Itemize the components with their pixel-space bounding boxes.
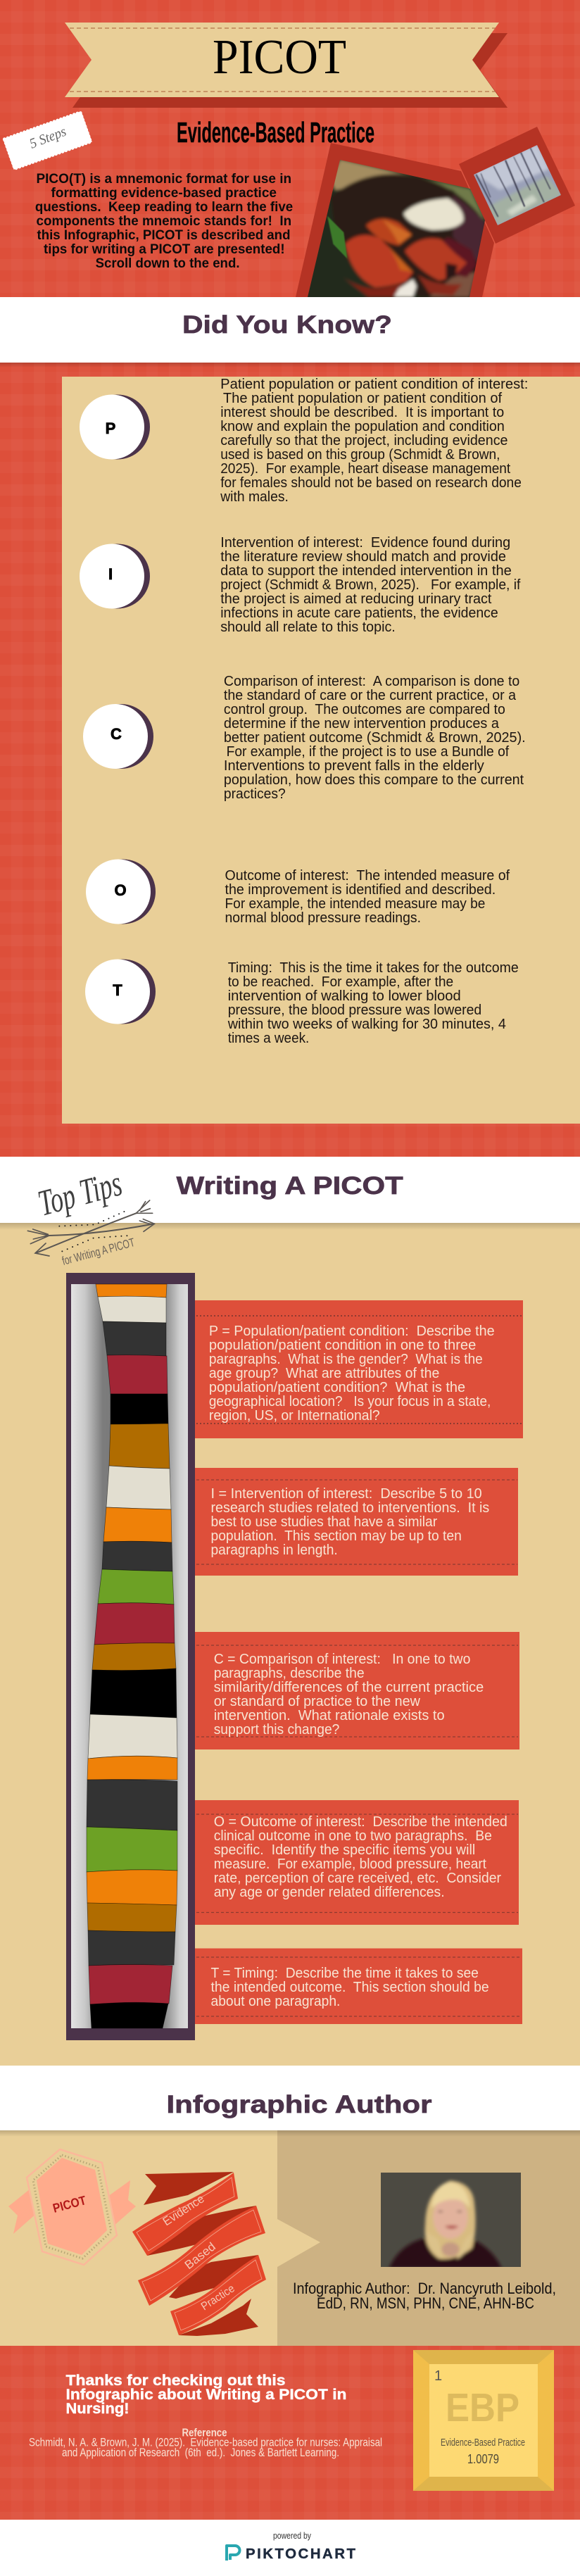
panel: closing section bbox=[0, 2346, 580, 2520]
circle: O: O bbox=[114, 881, 127, 899]
subtitle: Evidence-Based Practice bbox=[177, 116, 374, 149]
callout: I: best to use studies that have a similar bbox=[211, 1514, 437, 1530]
text: intervention bbox=[220, 535, 521, 635]
callout: P: region, US, or International? bbox=[209, 1408, 380, 1424]
text: patient population: with males. bbox=[220, 489, 289, 505]
text: intervention: infections in acute care patients, the evidence bbox=[220, 605, 498, 621]
circle: P bbox=[80, 394, 150, 459]
intro paragraph: components the mnemoic stands for! In bbox=[37, 213, 291, 229]
thanks message: Thanks for checking out this bbox=[66, 2373, 286, 2389]
text: outcome bbox=[225, 868, 510, 926]
callout: C: support this change? bbox=[214, 1722, 339, 1738]
icon: Piktochart logo bbox=[227, 2546, 239, 2561]
text: comparison: the standard of care or the current practice, or a bbox=[224, 688, 517, 703]
author right tan bbox=[277, 2130, 580, 2346]
text: comparison: Interventions to prevent falls in the elderly bbox=[224, 758, 484, 774]
panel beige card bbox=[62, 377, 580, 1124]
circle: T bbox=[85, 959, 156, 1024]
callout: I: research studies related to interventions. It is bbox=[211, 1500, 489, 1516]
author caption bbox=[293, 2280, 556, 2312]
text: patient population: interest should be described. It is important to bbox=[220, 405, 504, 420]
circle: I bbox=[80, 544, 150, 608]
callout: P: P = Population/patient condition: Describe the bbox=[209, 1324, 495, 1339]
text: patient population: carefully so that the project, including evidence bbox=[220, 433, 508, 448]
circle: I: I bbox=[108, 565, 113, 583]
text: intervention: should all relate to this topic. bbox=[220, 620, 396, 635]
text: patient population: The patient population or patient condition of bbox=[223, 391, 503, 406]
element card: EBP: 1 bbox=[434, 2368, 442, 2384]
reference: Schmidt, N. A. & Brown, J. M. (2025). Evidence-based practice for nurses: Appraisal bbox=[29, 2436, 382, 2449]
callout: P: age group? What are attributes of the bbox=[209, 1366, 439, 1381]
heading band: Infographic Author bbox=[0, 2066, 580, 2130]
callout: P: population/patient condition in one to three bbox=[209, 1338, 476, 1353]
intro paragraph: questions. Keep reading to learn the five bbox=[35, 199, 293, 215]
callout: T: the intended outcome. This section should be bbox=[211, 1980, 489, 1995]
tag: 5 Steps bbox=[4, 113, 91, 168]
text: timing: pressure, the blood pressure was lowered bbox=[228, 1003, 481, 1018]
text: comparison: population, how does this compare to the current bbox=[224, 772, 524, 788]
callout: P bbox=[195, 1300, 523, 1438]
column frame bbox=[66, 1273, 195, 2040]
footer: powered by Piktochart: powered by bbox=[273, 2530, 311, 2541]
panel: PICOT definitions bbox=[0, 363, 580, 1157]
intro paragraph: this Infographic, PICOT is described and bbox=[37, 227, 290, 243]
text: timing: within two weeks of walking for 30 minutes, 4 bbox=[227, 1017, 506, 1032]
text: timing: intervention of walking to lower blood bbox=[228, 988, 461, 1004]
callout: C bbox=[195, 1632, 519, 1749]
circle: T: T bbox=[113, 981, 122, 999]
circle: P: P bbox=[106, 420, 115, 437]
callout: O: any age or gender related differences. bbox=[214, 1885, 445, 1900]
text: patient population: used is based on this group (Schmidt & Brown, bbox=[220, 447, 500, 463]
text: outcome: the improvement is identified and described. bbox=[225, 882, 496, 898]
text: outcome: For example, the intended measure may be bbox=[225, 896, 485, 912]
ribbon: Evidence Based Practice: Based bbox=[182, 2239, 218, 2272]
text: timing: Timing: This is the time it takes for the outcome bbox=[228, 960, 519, 976]
thanks message: Nursing! bbox=[66, 2401, 130, 2417]
panel plaid frame bbox=[0, 363, 580, 1157]
arrow pointer bbox=[277, 2219, 320, 2267]
crossed arrows bbox=[27, 1200, 154, 1256]
text: comparison: better patient outcome (Schmidt & Brown, 2025). bbox=[224, 730, 526, 746]
intro paragraph: Scroll down to the end. bbox=[96, 256, 239, 271]
reference: Reference bbox=[182, 2427, 227, 2439]
text: comparison: control group. The outcomes are compared to bbox=[224, 702, 505, 717]
text: comparison bbox=[224, 674, 526, 802]
element card: EBP bbox=[413, 2350, 554, 2491]
intro paragraph: formatting evidence-based practice bbox=[51, 185, 277, 201]
thanks message: Infographic about Writing a PICOT in bbox=[66, 2387, 347, 2403]
intro paragraph: PICO(T) is a mnemonic format for use in bbox=[37, 171, 291, 187]
header section bbox=[0, 0, 580, 301]
ribbon: Evidence Based Practice bbox=[132, 2172, 266, 2336]
heading band: Writing A PICOT bbox=[0, 1157, 580, 1223]
closing plaid background bbox=[0, 2346, 580, 2520]
intro paragraph: tips for writing a PICOT are presented! bbox=[44, 241, 285, 257]
callout: C: or standard of practice to the new bbox=[214, 1694, 420, 1709]
column grey inner bbox=[71, 1284, 188, 2028]
text: patient population: know and explain the population and condition bbox=[220, 419, 505, 434]
callout: O: clinical outcome in one to two paragraphs. Be bbox=[214, 1828, 492, 1844]
heading band: Writing A PICOT: Writing A PICOT bbox=[177, 1172, 403, 1200]
callout: P: population/patient condition? What is the bbox=[209, 1380, 465, 1395]
text: patient population: 2025). For example, heart disease management bbox=[220, 461, 511, 477]
For Writing A PICOT label: for Writing A PICOT bbox=[61, 1236, 136, 1268]
striped column graphic bbox=[66, 1273, 195, 2040]
callout: O: specific. Identify the specific items you will bbox=[214, 1842, 475, 1858]
text: patient population: Patient population or patient condition of interest: bbox=[220, 377, 528, 392]
text: intervention: project (Schmidt & Brown, 2025). For example, if bbox=[220, 577, 521, 593]
tag: 5 Steps: 5 Steps bbox=[27, 124, 68, 152]
element card: EBP: EBP bbox=[446, 2385, 519, 2430]
callout: C: similarity/differences of the current practice bbox=[214, 1680, 484, 1695]
badge: PICOT: PICOT bbox=[51, 2193, 87, 2216]
callout: I: I = Intervention of interest: Describe 5 to 10 bbox=[211, 1486, 482, 1502]
callout: T bbox=[195, 1949, 522, 2024]
title ribbon banner bbox=[65, 23, 508, 108]
thanks message bbox=[66, 2373, 347, 2417]
heading band: Did You Know: Did You Know? bbox=[182, 311, 392, 339]
ribbon: Evidence Based Practice: Evidence bbox=[160, 2192, 207, 2228]
text: timing bbox=[227, 960, 519, 1046]
intro paragraph bbox=[35, 171, 293, 271]
heading band: Did You Know bbox=[0, 297, 580, 363]
callout: T: T = Timing: Describe the time it takes to see bbox=[211, 1966, 479, 1981]
text: patient population bbox=[220, 377, 528, 505]
callout: P: paragraphs. What is the gender? What is the bbox=[209, 1352, 483, 1367]
header plaid background bbox=[0, 0, 580, 297]
callout: C: C = Comparison of interest: In one to two bbox=[214, 1652, 470, 1667]
author photo bbox=[381, 2173, 521, 2268]
title: PICOT bbox=[213, 30, 346, 84]
handwritten Top Tips: Top Tips bbox=[34, 1163, 126, 1224]
author left beige bbox=[0, 2130, 277, 2346]
callout: O: rate, perception of care received, etc. Consider bbox=[214, 1871, 501, 1886]
author caption: EdD, RN, MSN, PHN, CNE, AHN-BC bbox=[317, 2294, 534, 2312]
callout: I bbox=[195, 1468, 518, 1576]
text: intervention: data to support the intended intervention in the bbox=[220, 563, 512, 579]
callout: O: measure. For example, blood pressure, heart bbox=[214, 1856, 486, 1872]
text: outcome: normal blood pressure readings. bbox=[225, 910, 421, 926]
text: timing: to be reached. For example, after the bbox=[228, 974, 453, 990]
panel: author section bbox=[0, 2130, 580, 2346]
callout: O: O = Outcome of interest: Describe the intended bbox=[214, 1814, 508, 1830]
circle: O bbox=[86, 859, 156, 924]
text: comparison: determine if the new intervention produces a bbox=[224, 716, 500, 731]
callout: C: paragraphs, describe the bbox=[214, 1666, 365, 1681]
callout: P: geographical location? Is your focus in a state, bbox=[209, 1394, 491, 1409]
photo: tulips in frame bbox=[296, 143, 494, 301]
text: timing: times a week. bbox=[228, 1031, 309, 1046]
callout: O bbox=[195, 1800, 519, 1925]
dotted rows bbox=[59, 1210, 129, 1251]
text: outcome: Outcome of interest: The intended measure of bbox=[225, 868, 510, 884]
heading band: Infographic Author: Infographic Author bbox=[166, 2091, 432, 2118]
circle: C: C bbox=[111, 725, 122, 743]
reference: and Application of Research (6th ed.). Jones & Bartlett Learning. bbox=[62, 2446, 339, 2459]
text: comparison: For example, if the project is to use a Bundle of bbox=[227, 744, 510, 760]
footer: powered by Piktochart bbox=[0, 2520, 580, 2576]
ribbon: Evidence Based Practice: Practice bbox=[199, 2282, 237, 2313]
text: patient population: for females should not be based on research done bbox=[220, 475, 522, 491]
circle: C bbox=[83, 704, 153, 769]
column stripes bbox=[87, 1284, 177, 2028]
footer: powered by Piktochart: PIKTOCHART bbox=[246, 2546, 355, 2562]
text: comparison: practices? bbox=[224, 786, 286, 802]
reference bbox=[29, 2427, 382, 2459]
callout: T: about one paragraph. bbox=[211, 1994, 340, 2009]
icon: top tips arrows badge bbox=[27, 1163, 154, 1268]
panel: writing a PICOT background bbox=[0, 1223, 580, 2066]
text: intervention: the literature review should match and provide bbox=[220, 549, 506, 565]
text: comparison: Comparison of interest: A comparison is done to bbox=[224, 674, 519, 689]
callout: I: paragraphs in length. bbox=[211, 1543, 338, 1558]
callout: C: intervention. What rationale exists to bbox=[214, 1708, 445, 1723]
photo: forest in frame bbox=[459, 127, 575, 244]
element card: EBP: Evidence-Based Practice bbox=[441, 2437, 525, 2449]
element card: EBP: 1.0079 bbox=[467, 2452, 499, 2466]
badge: PICOT bbox=[8, 2149, 136, 2265]
callout: I: population. This section may be up to ten bbox=[211, 1528, 462, 1544]
author caption: Infographic Author: Dr. Nancyruth Leibold, bbox=[293, 2280, 556, 2297]
text: intervention: Intervention of interest: Evidence found during bbox=[220, 535, 510, 551]
text: intervention: the project is aimed at reducing urinary tract bbox=[220, 591, 492, 607]
